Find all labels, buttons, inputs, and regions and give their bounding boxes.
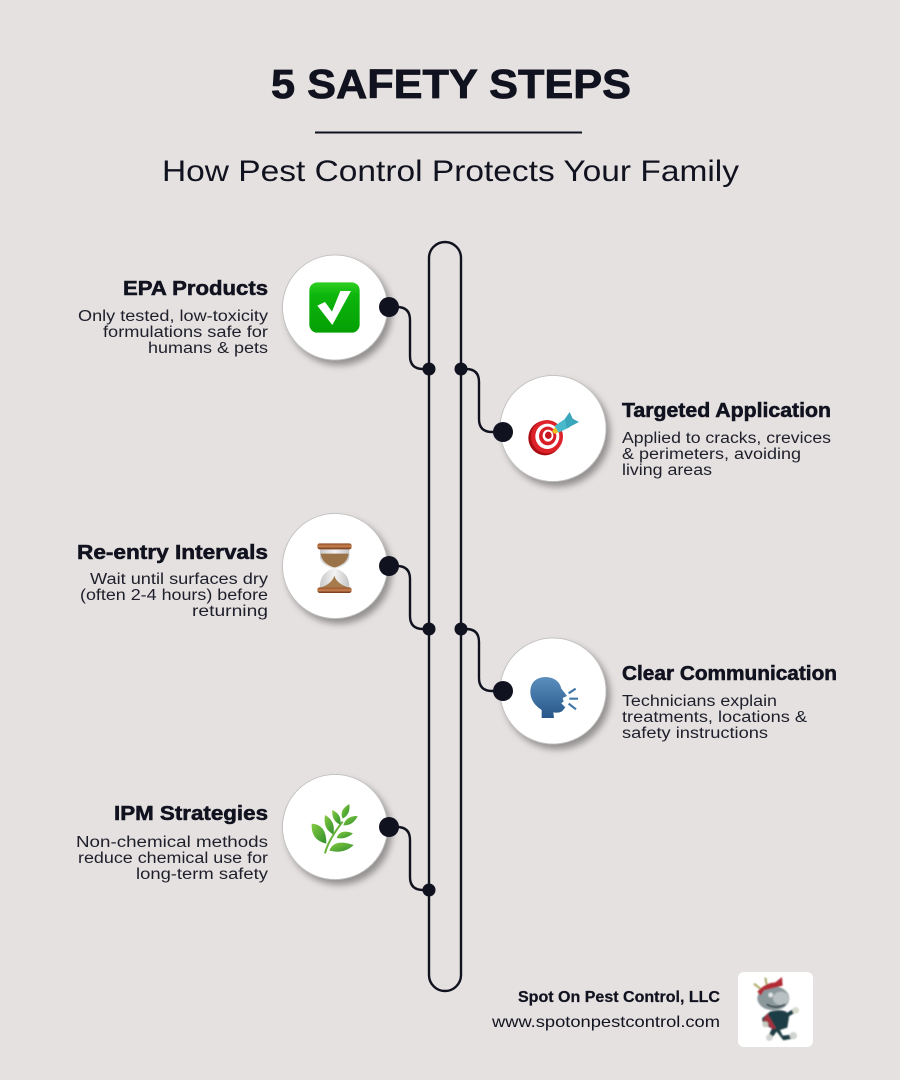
end dot 4 <box>493 681 513 701</box>
icon: hourglass <box>317 543 352 593</box>
heading 2: Targeted Application <box>622 400 831 422</box>
description 2: Applied to cracks, crevices <box>622 430 831 447</box>
heading 5: IPM Strategies <box>114 803 268 825</box>
logo mascot <box>738 972 813 1047</box>
icon circle 3 <box>282 514 388 618</box>
heading 4: Clear Communication <box>622 663 837 685</box>
description 1: humans & pets <box>148 340 268 357</box>
title: 5 SAFETY STEPS <box>271 61 631 107</box>
icon: target with dart <box>528 412 579 455</box>
heading 1: EPA Products <box>123 278 268 300</box>
description 4: safety instructions <box>622 725 768 742</box>
description 4 <box>622 693 808 742</box>
description 1: Only tested, low-toxicity <box>78 308 268 325</box>
connector 3 <box>389 566 436 636</box>
icon: herb leaves <box>312 804 358 853</box>
connector 1 <box>389 307 436 376</box>
connector 5 <box>389 827 436 896</box>
icon circle 2 <box>500 376 606 482</box>
description 2: & perimeters, avoiding <box>622 446 801 463</box>
end dot 3 <box>379 556 399 576</box>
end dot 5 <box>379 817 399 837</box>
footer website: www.spotonpestcontrol.com <box>491 1014 720 1031</box>
description 5: long-term safety <box>136 866 268 883</box>
end dot 1 <box>379 297 399 317</box>
icon circle 1 <box>282 255 388 360</box>
description 5 <box>76 834 268 883</box>
description 1: formulations safe for <box>103 324 268 341</box>
step 4: Clear Communication <box>454 622 837 744</box>
title divider <box>315 132 582 134</box>
description 4: treatments, locations & <box>622 709 808 726</box>
icon circle 5 <box>282 774 388 880</box>
step 3: Re-entry Intervals <box>77 514 436 636</box>
description 4: Technicians explain <box>622 693 777 710</box>
heading 3: Re-entry Intervals <box>77 542 268 564</box>
description 1 <box>78 308 268 357</box>
step 5: IPM Strategies <box>76 774 436 896</box>
description 2: living areas <box>622 462 712 479</box>
description 2 <box>622 430 831 479</box>
central timeline track <box>429 242 461 991</box>
connector 2 <box>454 362 503 432</box>
footer company name: Spot On Pest Control, LLC <box>518 989 720 1006</box>
step 2: Targeted Application <box>454 362 831 482</box>
description 5: reduce chemical use for <box>78 850 268 867</box>
icon: check mark <box>309 282 360 333</box>
description 3: returning <box>192 603 268 620</box>
description 3: (often 2-4 hours) before <box>80 587 268 604</box>
icon: speaking head <box>530 677 578 718</box>
icon circle 4 <box>500 638 606 744</box>
connector 4 <box>454 622 503 691</box>
description 3 <box>80 571 268 620</box>
subtitle: How Pest Control Protects Your Family <box>162 155 739 188</box>
step 1: EPA Products <box>78 255 436 376</box>
end dot 2 <box>493 422 513 442</box>
description 5: Non-chemical methods <box>76 834 268 851</box>
description 3: Wait until surfaces dry <box>90 571 268 588</box>
